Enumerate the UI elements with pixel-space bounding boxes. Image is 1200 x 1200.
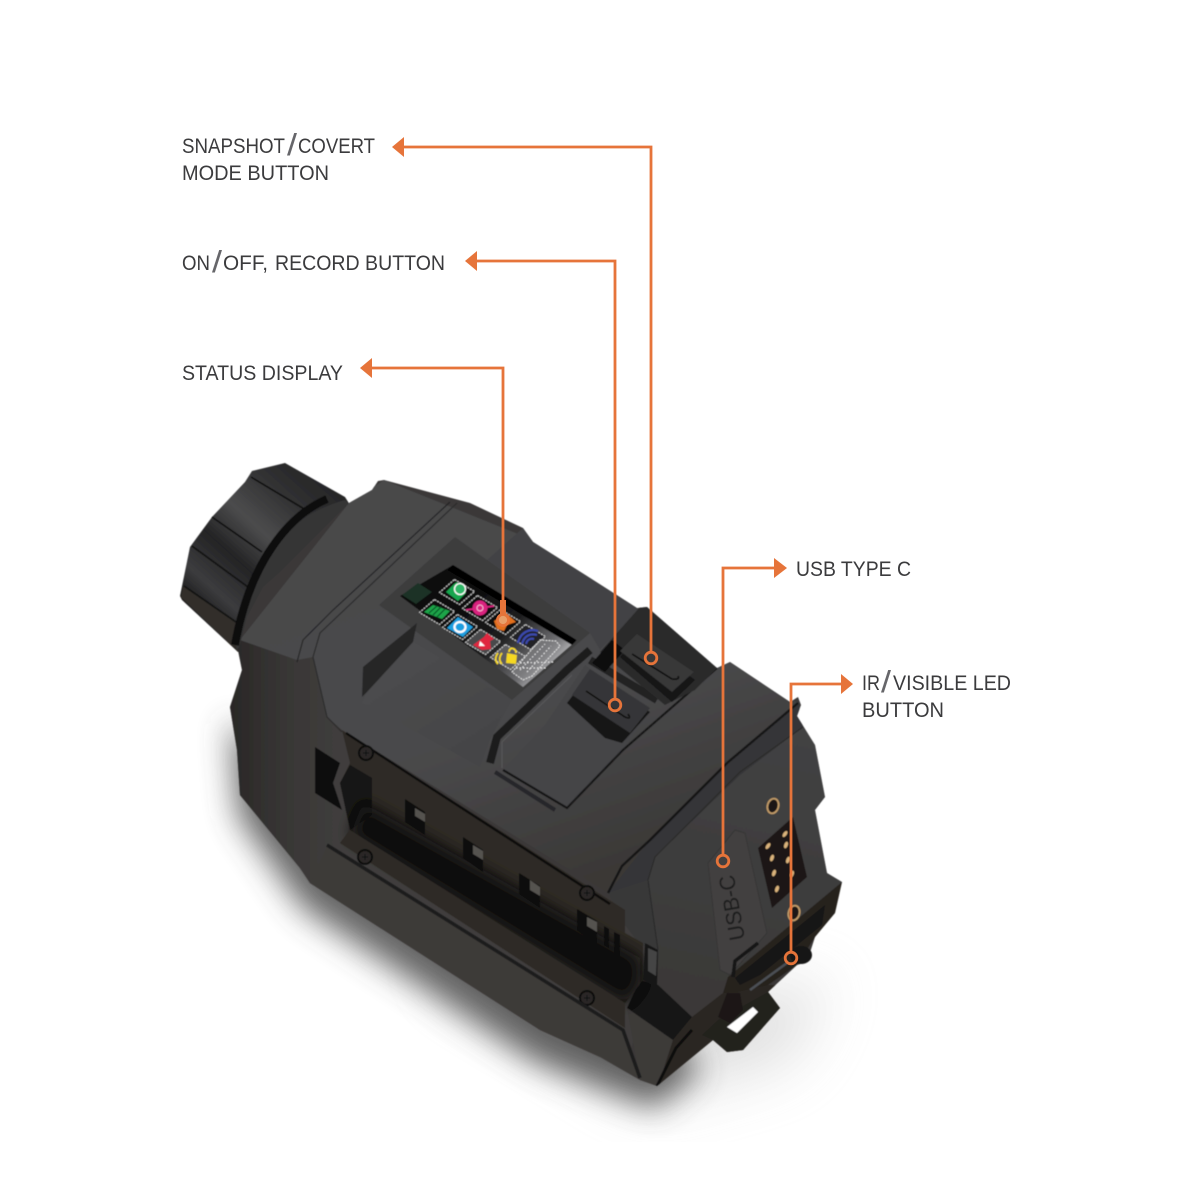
label: IR visible LED button: BUTTON — [862, 699, 944, 722]
pin connector — [758, 817, 807, 908]
icon: red arrow — [466, 630, 500, 654]
icon: pink status — [462, 596, 498, 620]
USB-C embossed label: USB-C — [714, 873, 750, 942]
label: on/off record button: OFF, — [223, 252, 268, 275]
rail screws — [358, 746, 594, 1005]
top face — [240, 480, 796, 820]
label: snapshot covert mode button: SNAPSHOT — [182, 135, 285, 158]
label: snapshot covert mode button: COVERT — [298, 135, 375, 158]
IR LED button — [790, 946, 812, 964]
lens barrel — [180, 463, 350, 652]
label: on/off record button: RECORD BUTTON — [275, 252, 445, 275]
label: status display: STATUS DISPLAY — [182, 362, 343, 385]
label: on/off record button: ON — [182, 252, 210, 275]
left side face — [230, 641, 644, 1008]
icon: info grid — [512, 640, 560, 680]
leader: status display — [360, 358, 508, 626]
on/off record button — [567, 669, 650, 743]
lanyard loop — [702, 992, 780, 1052]
front fold strip — [796, 709, 802, 725]
icon: yellow lock — [490, 644, 526, 670]
icon: camera mode — [440, 580, 474, 604]
display recess — [400, 565, 577, 687]
rail square holes — [405, 799, 425, 835]
label: snapshot covert mode button: / — [287, 127, 297, 162]
lower chin — [627, 882, 842, 1090]
seams on top — [297, 502, 450, 662]
button recess — [600, 607, 717, 705]
button plate — [503, 665, 650, 807]
icon: orange — [486, 610, 520, 634]
lower panel — [362, 642, 512, 767]
rail lower flap — [310, 845, 640, 1080]
side square port — [315, 747, 342, 810]
display hump — [518, 529, 632, 606]
label: IR visible LED button: IR — [862, 672, 880, 695]
snapshot covert button — [620, 634, 695, 702]
mounting screws — [766, 797, 801, 922]
leader: IR visible LED — [785, 674, 853, 964]
front face — [760, 728, 822, 856]
status icons — [420, 580, 560, 680]
icon: wifi — [510, 624, 546, 650]
body silhouette — [230, 480, 842, 1086]
label: snapshot covert mode button: MODE BUTTON — [182, 162, 329, 185]
leader: on/off record — [465, 251, 621, 711]
icon: blue ring — [442, 614, 478, 640]
icon: battery — [420, 600, 454, 624]
side rail plate — [340, 730, 658, 1028]
USB-C door — [708, 830, 767, 977]
label: on/off record button: / — [212, 244, 222, 279]
label: IR visible LED button: VISIBLE LED — [893, 672, 1011, 695]
leader: USB type C — [717, 558, 787, 867]
device: camera body — [180, 463, 842, 1090]
label: USB type C: USB TYPE C — [796, 558, 911, 581]
leader: snapshot covert — [392, 137, 657, 664]
label: IR visible LED button: / — [881, 664, 891, 699]
ground shadow — [230, 720, 830, 1108]
